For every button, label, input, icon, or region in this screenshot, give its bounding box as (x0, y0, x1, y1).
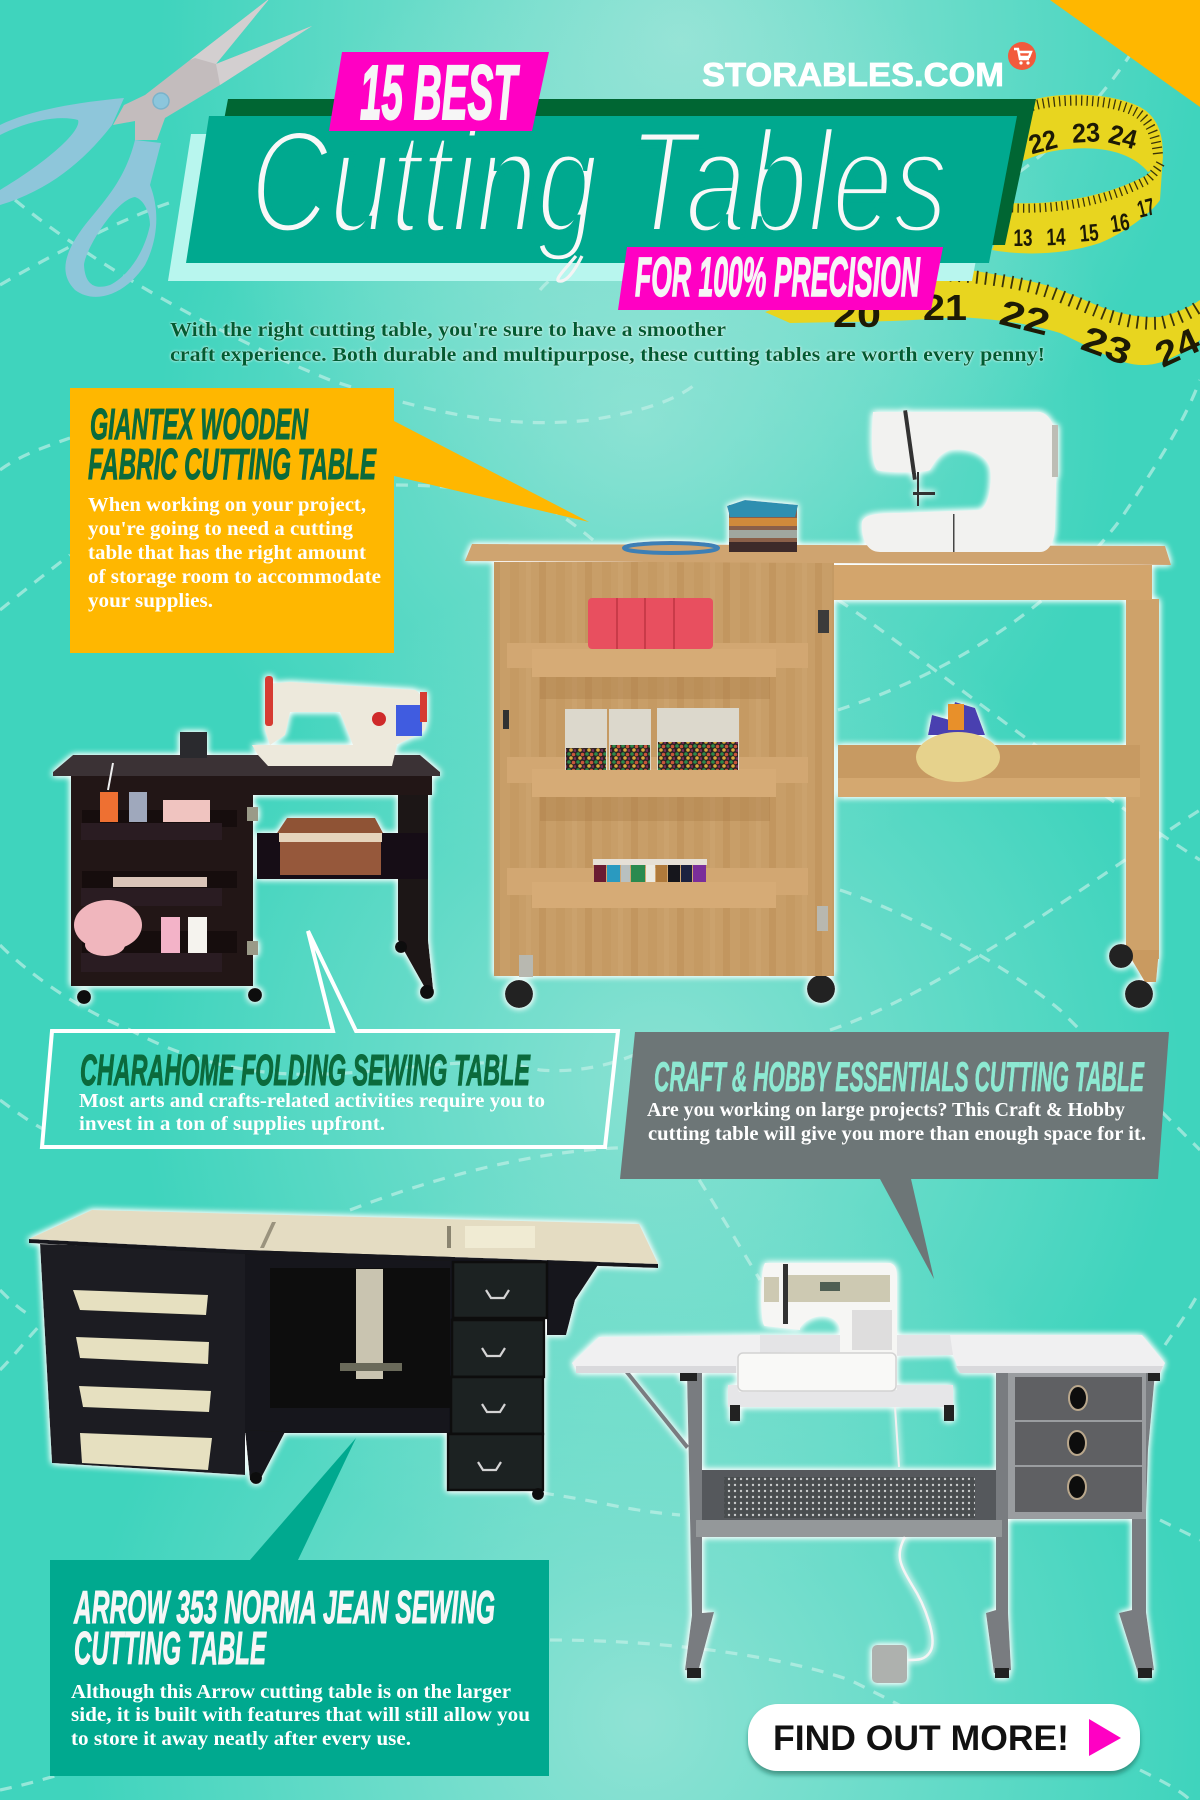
charahome heading: CHARAHOME FOLDING SEWING TABLE (80, 1046, 531, 1095)
craft and hobby body text: Are you working on large projects? This Craft & Hobby (647, 1099, 1125, 1121)
icon: measuring tape upper loop: 23 (1071, 117, 1101, 149)
icon: play arrow (1089, 1719, 1121, 1756)
right leg and casters (1126, 599, 1159, 959)
intro text: craft experience. Both durable and multipurpose, these cutting tables are worth every penny! (170, 344, 1045, 366)
arrow body text: to store it away neatly after every use. (71, 1728, 411, 1750)
arrow body text: side, it is built with features that will still allow you (71, 1704, 530, 1726)
storage trays (73, 1290, 212, 1470)
panel: charahome folding sewing table (42, 931, 618, 1147)
product: white craft table (572, 1263, 1165, 1683)
giantex heading: FABRIC CUTTING TABLE (88, 440, 377, 489)
panel: arrow 353 norma jean sewing cutting table (50, 1438, 549, 1776)
giantex body text (88, 494, 381, 612)
glitter tubes (593, 859, 707, 882)
craft and hobby body text: cutting table will give you more than enough space for it. (648, 1123, 1146, 1145)
main title text: Cutting Tables (252, 103, 950, 266)
giantex heading (88, 400, 377, 489)
badge: for 100% precision (618, 245, 943, 310)
arrow heading (73, 1581, 495, 1674)
table top (465, 544, 1171, 565)
main title text (258, 129, 943, 260)
icon: scissors (0, 0, 312, 297)
charahome body text (79, 1090, 545, 1135)
machine (737, 1263, 897, 1392)
fabric drawers (1008, 1373, 1146, 1519)
sewing machine (862, 410, 1058, 552)
table top (29, 1210, 658, 1264)
cabinet door (494, 562, 834, 976)
main title text: Cutting Tables (250, 100, 948, 263)
icon: measuring tape upper loop: 15 (1078, 219, 1100, 248)
giantex body text: When working on your project, (88, 494, 366, 516)
icon: measuring tape upper loop: 22 (1026, 124, 1060, 160)
panel: giantex wooden fabric cutting table (70, 388, 589, 653)
open shelf (838, 745, 1140, 781)
machine lift bracket (356, 1269, 383, 1379)
icon: measuring tape upper loop: 14 (1046, 224, 1066, 251)
panel: craft and hobby essentials cutting table (620, 1032, 1169, 1279)
product: arrow black sewing cabinet (29, 1210, 658, 1500)
arrow body text: Although this Arrow cutting table is on the larger (71, 1681, 511, 1703)
legs (625, 1373, 1160, 1673)
casters (77, 807, 434, 1004)
intro text (170, 319, 1045, 366)
charahome body text: Most arts and crafts-related activities require you to (79, 1090, 545, 1112)
badge: 15 best: 15 BEST (360, 50, 520, 136)
title banner (168, 99, 1036, 281)
arrow heading: CUTTING TABLE (74, 1622, 267, 1674)
icon: measuring tape upper loop (992, 95, 1163, 253)
arrow body text (71, 1681, 530, 1750)
giantex body text: your supplies. (88, 590, 213, 612)
blue cord (624, 543, 718, 553)
icon: measuring tape lower band (765, 270, 1200, 375)
jars of buttons (565, 708, 739, 770)
mesh panel (702, 1470, 996, 1520)
giantex heading: GIANTEX WOODEN (90, 400, 309, 449)
giantex body text: of storage room to accommodate (88, 566, 381, 588)
giantex body text: you're going to need a cutting (88, 518, 353, 540)
icon: measuring tape lower band: 21 (923, 287, 967, 328)
button: find out more (748, 1704, 1140, 1771)
hinges (503, 610, 829, 977)
logo: storables.com (702, 42, 1036, 93)
button: find out more: FIND OUT MORE! (773, 1719, 1069, 1758)
giantex body text: table that has the right amount (88, 542, 366, 564)
cord and foot pedal (872, 1407, 932, 1683)
product: charahome black table (53, 676, 440, 1004)
apron (834, 565, 1152, 600)
craft and hobby body text (647, 1099, 1146, 1145)
pen cup (180, 732, 207, 758)
drawers (448, 1262, 547, 1490)
charahome body text: invest in a ton of supplies upfront. (79, 1113, 385, 1135)
icon: measuring tape upper loop: 16 (1109, 209, 1132, 238)
icon: measuring tape upper loop: 24 (1106, 119, 1140, 155)
icon: measuring tape lower band: 23 (1076, 318, 1137, 373)
icon: measuring tape upper loop: 13 (1014, 225, 1032, 252)
red thread spools (588, 598, 713, 649)
corner triangle (1050, 0, 1200, 107)
table top (572, 1335, 770, 1373)
icon: measuring tape lower band: 22 (996, 292, 1054, 343)
icon: measuring tape lower band: 20 (833, 294, 881, 335)
wicker basket (277, 818, 383, 875)
shelves (507, 643, 808, 908)
fabric stack (727, 500, 798, 552)
logo: storables.com: STORABLES.COM (702, 56, 1004, 93)
machine shelf (728, 1385, 954, 1421)
product: wooden folding table (465, 410, 1171, 1008)
icon: measuring tape upper loop: 17 (1135, 193, 1158, 224)
arrow heading: ARROW 353 NORMA JEAN SEWING (73, 1581, 495, 1633)
shelves and contents (74, 763, 237, 972)
industrial sewing machine (252, 676, 427, 766)
basket (916, 702, 1000, 782)
badge: 15 best (329, 50, 549, 136)
intro text: With the right cutting table, you're sure to have a smoother (170, 319, 726, 341)
